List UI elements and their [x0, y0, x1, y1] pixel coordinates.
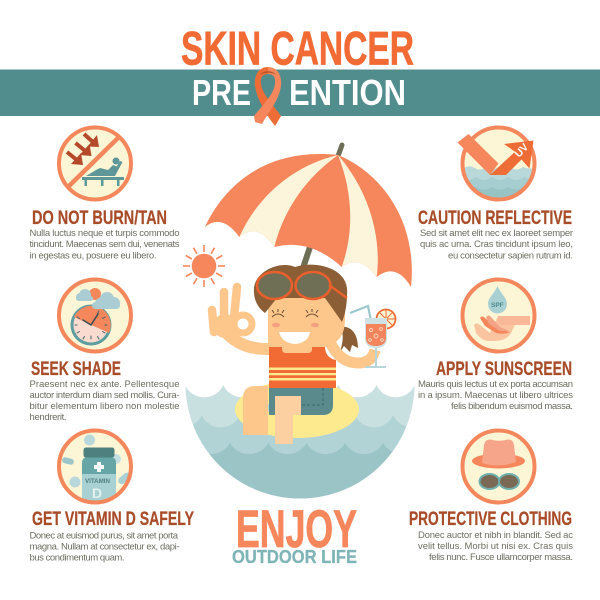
text block: Nulla luctus neque et turpis commodo [30, 228, 180, 239]
panel: do not burn/tan [30, 128, 180, 262]
text block: hendrerit. [30, 412, 66, 423]
text block [30, 379, 180, 423]
text block: tincidunt. Maecenas sem dui, venenats [30, 239, 180, 250]
girl: face [268, 295, 345, 353]
text block: felis bibendum euismod massa. [451, 401, 573, 412]
title: skin cancer: SKIN CANCER [181, 22, 414, 74]
icon: clock and clouds [59, 280, 131, 352]
icon: reflected uv: UV [512, 141, 531, 160]
text block [30, 228, 180, 262]
text block: magna. Nullam at consectetur ex, dapi- [30, 542, 180, 552]
icon: no tanning [59, 128, 131, 200]
heading: outdoor life: OUTDOOR LIFE [232, 547, 357, 567]
text block: auctor interdum diam sed mollis. Cura- [30, 390, 180, 401]
text block: in a ipsum. Maecenas ut libero ultrices [418, 390, 573, 401]
text block: eu consectetur sapien rutrum id. [448, 250, 573, 262]
text block [418, 379, 573, 412]
icon: hat and sunglasses [462, 430, 534, 502]
icon: awareness ribbon [254, 67, 281, 126]
sea waves [186, 385, 414, 498]
heading: prevention: ENTION [289, 72, 406, 113]
illustration: girl under umbrella [183, 142, 414, 498]
icon: sunscreen on hand [462, 280, 534, 352]
icon: vitamin bottle [59, 430, 132, 506]
panel: seek shade [30, 280, 180, 423]
ring hole [261, 404, 279, 412]
icon: vitamin bottle: D [92, 485, 102, 501]
girl: right arm [330, 342, 375, 363]
text block [30, 530, 180, 564]
icon: umbrella [205, 145, 412, 287]
heading: GET VITAMIN D SAFELY [32, 508, 194, 530]
text block: Donec at euismod purus, sit amet porta [30, 530, 179, 542]
text block: bus condimentum quam. [30, 552, 124, 564]
girl: shirt [269, 346, 336, 388]
girl: hair [254, 265, 347, 322]
text block: velit tellus. Morbi ut nisi ex. Cras quis [418, 541, 573, 552]
text block [420, 228, 573, 262]
swim ring [235, 381, 359, 438]
panel: get vitamin d safely [30, 430, 194, 564]
panel: apply sunscreen [418, 280, 573, 412]
heading: prevention: PRE [192, 72, 251, 113]
heading: prevention [192, 72, 406, 113]
girl: sunglasses [257, 272, 347, 299]
banner band [0, 70, 600, 116]
heading: enjoy: ENJOY [236, 500, 357, 559]
text block: in egestas eu, posuere eu libero. [30, 250, 156, 262]
girl: shorts [269, 388, 333, 415]
text block: bitur elementum libero non molestie [30, 401, 180, 412]
text block: felis nunc. Fusce ullamcorper massa. [429, 552, 573, 563]
text block: Sed sit amet elit nec ex laoreet semper [420, 228, 573, 239]
text block: quis ac urna. Cras tincidunt ipsum leo, [420, 239, 573, 250]
text block: Praesent nec ex ante. Pellentesque [30, 379, 180, 390]
text block [418, 530, 573, 563]
girl: left arm with ok hand [212, 287, 270, 349]
panel: caution reflective [418, 128, 573, 262]
icon: sun [183, 245, 225, 287]
icon: reflected uv [458, 128, 540, 205]
heading: DO NOT BURN/TAN [32, 207, 167, 229]
icon: vitamin bottle: VITAMIN [85, 478, 110, 485]
girl: ponytail [340, 327, 358, 352]
text block: Donec auctor et nibh in blandit. Sed ac [418, 530, 573, 541]
icon: sunscreen on hand: SPF [491, 302, 504, 309]
text block: Mauris quis lectus ut ex porta accumsan [418, 379, 573, 390]
panel: protective clothing [409, 430, 573, 563]
girl: near leg [275, 396, 301, 444]
heading: SEEK SHADE [31, 358, 121, 380]
girl: far leg [243, 386, 268, 435]
icon: cocktail [350, 306, 396, 367]
